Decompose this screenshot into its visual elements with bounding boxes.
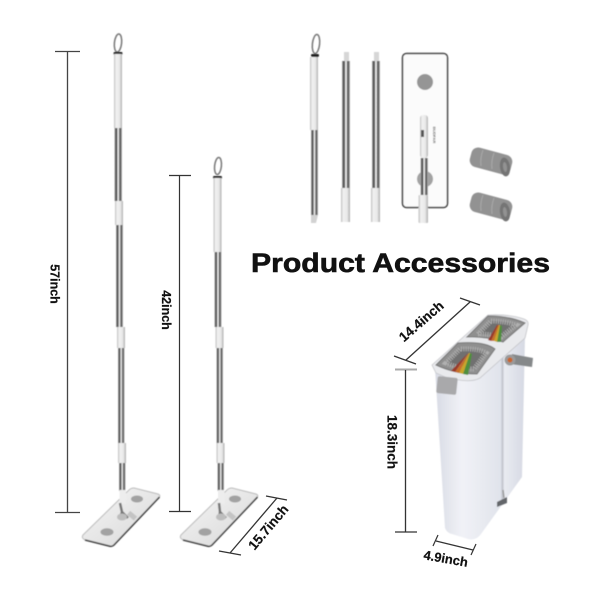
- mop pad roll 2: [468, 191, 514, 222]
- drain valve: [497, 497, 507, 507]
- rim: [432, 315, 528, 381]
- tall mop, 57 inch: [82, 34, 160, 546]
- dimension: 18.3inch: [384, 370, 417, 532]
- mop head, top view: [402, 54, 448, 223]
- dimension: 4.9inch: [422, 535, 476, 570]
- bucket body: [435, 336, 525, 539]
- mop pad roll 1: [468, 146, 514, 177]
- short mop hanging loop: [214, 157, 222, 175]
- dimension: 15.7inch: [219, 496, 291, 555]
- accessories: disassembled mop parts: [310, 34, 514, 223]
- right basket with coloured strips: [467, 316, 525, 342]
- title: Product Accessories: [251, 248, 550, 278]
- dimension: 57inch: 57inch: [48, 264, 62, 304]
- middle pole section 1: [341, 52, 350, 222]
- tall mop flat head: [82, 488, 160, 546]
- dimension: 14.4inch: 14.4inch: [396, 298, 447, 345]
- dimension: 42inch: [159, 176, 191, 512]
- cleaning bucket: [432, 315, 533, 539]
- short mop flat head: [180, 488, 258, 546]
- front clip: [436, 376, 458, 395]
- dimension: 42inch: 42inch: [159, 290, 173, 330]
- side knob: [504, 354, 533, 367]
- dimension: 4.9inch: 4.9inch: [422, 547, 469, 570]
- top handle section: [310, 34, 321, 223]
- dimension: 57inch: [48, 52, 80, 512]
- dimension: 18.3inch: 18.3inch: [384, 415, 400, 469]
- left basket with coloured strips: [436, 343, 495, 375]
- mop head, top view: BUDFAR: [432, 127, 437, 143]
- tall mop hanging loop: [113, 34, 123, 52]
- dimension: 14.4inch: [394, 298, 480, 364]
- dimension: 15.7inch: 15.7inch: [245, 502, 291, 553]
- short mop, 42 inch: [180, 157, 258, 546]
- middle pole section 2: [371, 52, 380, 222]
